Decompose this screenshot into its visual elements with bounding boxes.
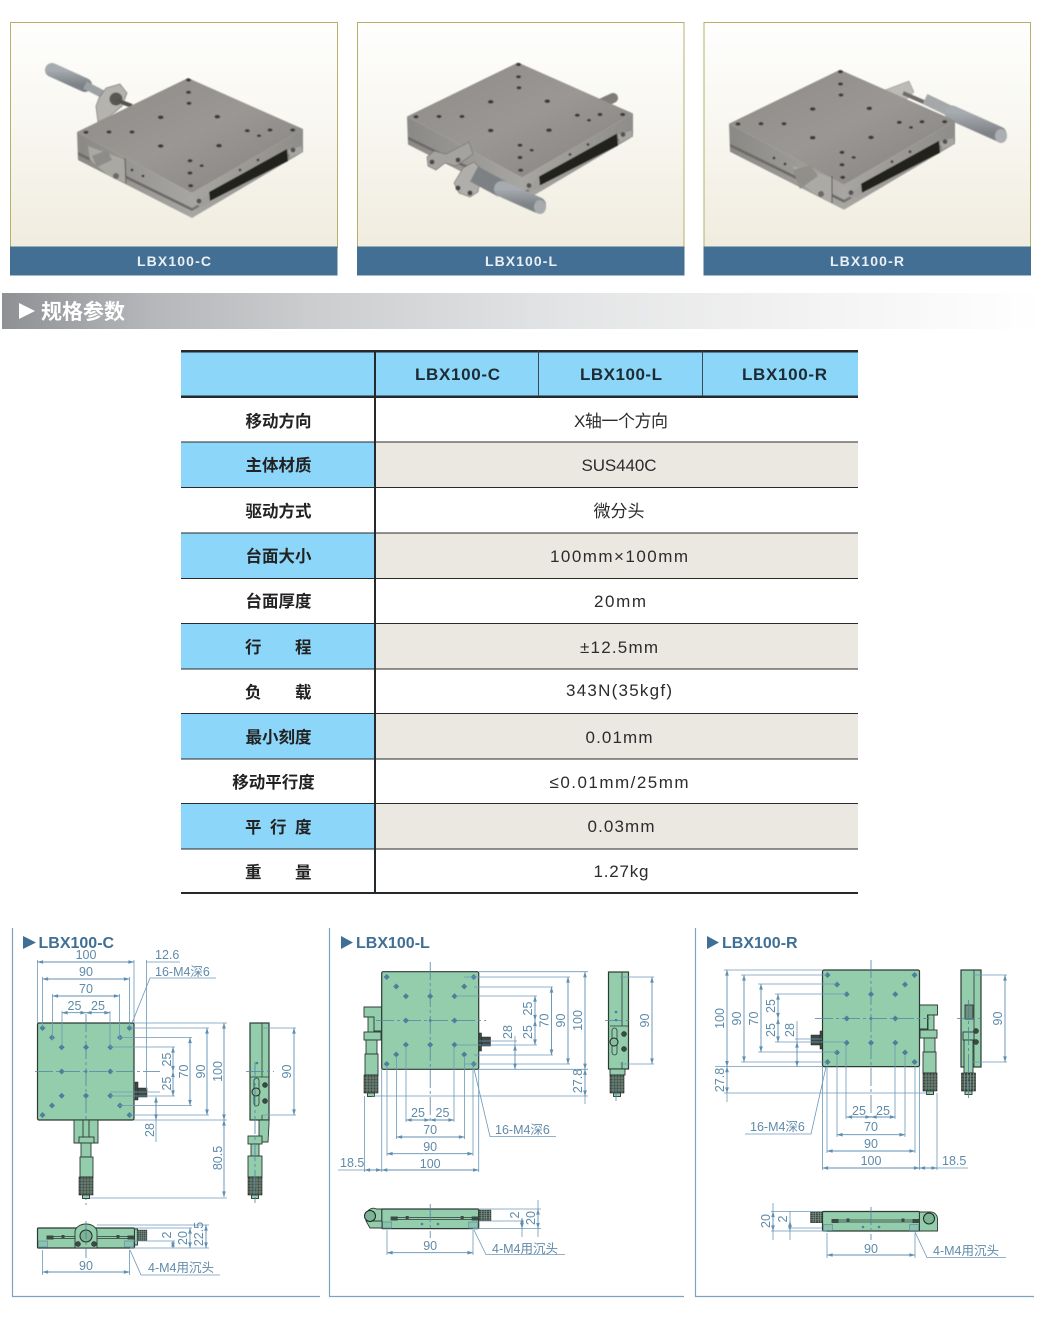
dimensions L top: 27.8 bbox=[571, 1069, 585, 1093]
row labels: 平行度 bbox=[245, 814, 312, 838]
dimensions C top: 12.6 bbox=[155, 948, 179, 962]
bottom view C bbox=[38, 1221, 220, 1275]
dimensions R top: 25 bbox=[764, 1023, 778, 1037]
panel: drawing LBX100-L bbox=[330, 928, 684, 1296]
caption band bbox=[704, 246, 1031, 276]
row labels: 负载 bbox=[245, 679, 312, 703]
table header: LBX100-L bbox=[580, 365, 662, 384]
dimensions C top: 70 bbox=[177, 1065, 191, 1078]
side view R bbox=[957, 970, 1007, 1098]
bottom view R: 20 bbox=[759, 1214, 773, 1228]
dimensions L top: 25 bbox=[521, 1002, 535, 1015]
caption band: LBX100-C bbox=[137, 253, 211, 269]
row values: 20mm bbox=[594, 592, 646, 611]
row values bbox=[550, 412, 688, 881]
table: specifications bbox=[181, 350, 858, 894]
bottom view C: 90 bbox=[79, 1259, 93, 1273]
dimensions L top: 100 bbox=[420, 1157, 441, 1171]
bottom view L: 20 bbox=[524, 1211, 538, 1225]
row values: 0.03mm bbox=[588, 817, 654, 836]
dimensions L top: 70 bbox=[538, 1014, 552, 1027]
row values: 0.01mm bbox=[586, 728, 652, 747]
dimensions L top: 25 bbox=[436, 1106, 449, 1120]
heading banner: 规格参数: 规格参数 bbox=[41, 296, 125, 326]
icon: micrometer handle L bbox=[454, 162, 546, 214]
top view R bbox=[811, 960, 938, 1117]
side view C bbox=[246, 1023, 296, 1203]
heading banner: 规格参数 bbox=[2, 293, 1041, 329]
dimensions C top: 100 bbox=[211, 1061, 225, 1082]
heading: LBX100-R: LBX100-R bbox=[722, 935, 798, 952]
row labels: 台面大小 bbox=[246, 543, 312, 567]
dimensions L top: 25 bbox=[521, 1025, 535, 1039]
row values: 100mm×100mm bbox=[550, 547, 688, 566]
dimensions R top: 27.8 bbox=[713, 1068, 727, 1092]
panel: product photo LBX100-R bbox=[704, 22, 1031, 276]
table header: LBX100-R bbox=[742, 365, 827, 384]
icon: micrometer handle R bbox=[885, 81, 1007, 143]
bottom view C: 20 bbox=[176, 1231, 190, 1245]
icon: micrometer handle C bbox=[52, 70, 132, 122]
row values: SUS440C bbox=[582, 456, 656, 475]
bottom view L bbox=[364, 1200, 565, 1256]
dimensions L top: 16-M4深6 bbox=[495, 1123, 550, 1137]
illustration: stage L bbox=[407, 62, 633, 202]
row values: 343N(35kgf) bbox=[566, 681, 672, 700]
dimensions R top: 16-M4深6 bbox=[750, 1120, 805, 1134]
icon: banner triangle bbox=[19, 303, 35, 319]
row labels: 行程 bbox=[245, 634, 312, 658]
row values: ≤0.01mm/25mm bbox=[550, 773, 688, 792]
dimensions C top: 25 bbox=[160, 1053, 174, 1066]
dimensions R top: 18.5 bbox=[942, 1154, 966, 1168]
dimensions R top: 70 bbox=[864, 1120, 878, 1134]
dimensions R top bbox=[713, 970, 968, 1170]
bottom view R: 2 bbox=[776, 1215, 790, 1222]
row values: ±12.5mm bbox=[580, 638, 658, 657]
row labels: 驱动方式 bbox=[246, 498, 312, 522]
heading: LBX100-L: LBX100-L bbox=[356, 935, 430, 952]
illustration: stage R bbox=[729, 70, 955, 210]
row labels: 主体材质 bbox=[246, 452, 312, 476]
caption band: LBX100-L bbox=[485, 253, 557, 269]
row labels: 移动方向 bbox=[246, 408, 312, 432]
row values: X轴一个方向 bbox=[574, 412, 668, 431]
dimensions L top: 90 bbox=[554, 1014, 568, 1027]
dimensions R top: 100 bbox=[713, 1008, 727, 1029]
dimensions C top: 90 bbox=[79, 965, 93, 979]
bottom view L: 90 bbox=[423, 1239, 437, 1253]
bottom view C: 22.5 bbox=[192, 1222, 206, 1246]
row labels bbox=[232, 408, 315, 883]
dimensions R top: 25 bbox=[764, 999, 778, 1013]
caption band bbox=[10, 246, 338, 276]
dimensions C top: 25 bbox=[160, 1077, 174, 1090]
caption band: LBX100-R bbox=[830, 253, 904, 269]
dimensions R top: 70 bbox=[747, 1012, 761, 1025]
dimensions R top: 100 bbox=[861, 1154, 881, 1168]
dimensions R top: 90 bbox=[864, 1137, 878, 1151]
dimensions C top: 28 bbox=[143, 1123, 157, 1137]
bottom view R bbox=[759, 1203, 1006, 1258]
dimensions L top: 70 bbox=[423, 1123, 437, 1137]
dimensions C top: 70 bbox=[79, 982, 93, 996]
dimensions L top: 90 bbox=[423, 1140, 437, 1154]
illustration: stage C bbox=[77, 78, 303, 218]
dimensions L top: 25 bbox=[411, 1106, 425, 1120]
dimensions C top bbox=[38, 948, 227, 1198]
panel: product photo LBX100-L bbox=[357, 22, 684, 276]
bottom view L: 2 bbox=[508, 1211, 522, 1218]
side view R: 90 bbox=[991, 1012, 1005, 1025]
panel: product photo LBX100-C bbox=[10, 22, 338, 276]
dimensions R top: 25 bbox=[852, 1104, 866, 1118]
dimensions C top: 16-M4深6 bbox=[155, 965, 210, 979]
top view L bbox=[364, 962, 490, 1120]
row values: 1.27kg bbox=[594, 862, 648, 881]
dimensions C top: 80.5 bbox=[211, 1146, 225, 1170]
bottom view R: 90 bbox=[864, 1242, 878, 1256]
bottom view C: 4-M4用沉头 bbox=[148, 1261, 214, 1275]
bottom view C: 2 bbox=[160, 1231, 174, 1238]
dimensions L top bbox=[338, 972, 588, 1172]
top view C bbox=[35, 1014, 160, 1205]
dimensions L top: 18.5 bbox=[340, 1156, 364, 1170]
dimensions R top: 25 bbox=[876, 1104, 890, 1118]
row labels: 台面厚度 bbox=[246, 588, 312, 612]
side view L: 90 bbox=[638, 1014, 652, 1027]
dimensions R top: 90 bbox=[730, 1012, 744, 1025]
side view C: 90 bbox=[280, 1065, 294, 1078]
caption band bbox=[357, 246, 684, 276]
row labels: 重量 bbox=[245, 859, 312, 883]
table header: LBX100-C bbox=[415, 365, 500, 384]
table header bbox=[415, 365, 827, 384]
row labels: 移动平行度 bbox=[232, 769, 315, 793]
row labels: 最小刻度 bbox=[246, 724, 312, 748]
dimensions C top: 90 bbox=[194, 1065, 208, 1078]
bottom view R: 4-M4用沉头 bbox=[933, 1244, 999, 1258]
dimensions L top: 100 bbox=[571, 1010, 585, 1031]
bottom view L: 4-M4用沉头 bbox=[492, 1242, 558, 1256]
side view L bbox=[605, 972, 654, 1101]
dimensions R top: 28 bbox=[783, 1023, 797, 1037]
dimensions C top: 100 bbox=[76, 948, 96, 962]
panel: drawing LBX100-R bbox=[696, 928, 1034, 1296]
dimensions L top: 28 bbox=[501, 1025, 515, 1039]
dimensions C top: 25 bbox=[68, 999, 81, 1013]
heading: LBX100-C: LBX100-C bbox=[38, 935, 115, 952]
panel: drawing LBX100-C bbox=[12, 928, 320, 1296]
dimensions C top: 25 bbox=[91, 999, 105, 1013]
row values: 微分头 bbox=[594, 502, 644, 521]
